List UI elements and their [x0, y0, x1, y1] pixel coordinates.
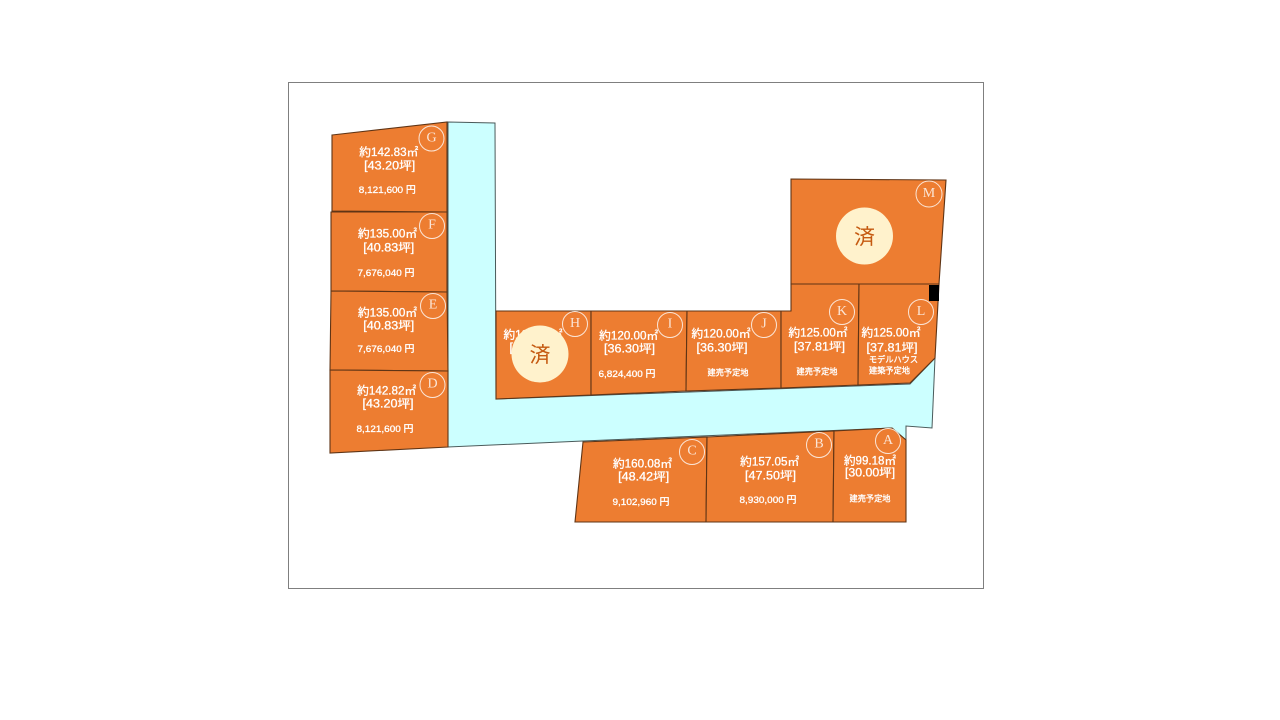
lot J: [36.30坪] — [696, 342, 748, 355]
lot I — [591, 311, 687, 395]
lot L: 約125.00㎡ — [862, 326, 921, 340]
lot A: 約99.18㎡ — [844, 454, 896, 468]
lot B: 8,930,000 円 — [740, 495, 796, 506]
lot K — [781, 284, 859, 388]
lot H — [496, 311, 591, 399]
lot G: 約142.83㎡ — [359, 145, 419, 159]
lot B: 約157.05㎡ — [740, 455, 800, 469]
lot E — [330, 291, 448, 371]
lot C: 9,102,960 円 — [612, 497, 670, 508]
lot I: I — [668, 316, 673, 332]
lot I: 6,824,400 円 — [598, 369, 656, 380]
lot A: [30.00坪] — [845, 467, 895, 480]
lot A: 建売予定地 — [850, 494, 891, 504]
lot L: L — [917, 304, 925, 319]
lot M: M — [923, 186, 936, 201]
lot C: [48.42坪] — [618, 471, 669, 484]
lot B: B — [814, 436, 824, 452]
lot G: G — [426, 130, 437, 146]
lot D: [43.20坪] — [362, 398, 414, 411]
lot A — [833, 428, 906, 522]
lot K: 建売予定地 — [796, 367, 838, 377]
lot D: 8,121,600 円 — [356, 424, 414, 435]
lot D — [330, 370, 448, 453]
lot H: 済 — [530, 339, 550, 369]
lot H: [36.30坪] — [510, 342, 560, 355]
lot K: [37.81坪] — [794, 341, 845, 354]
black marker — [929, 285, 939, 301]
lot C: 約160.08㎡ — [613, 457, 672, 471]
lot L: モデルハウス — [869, 355, 918, 365]
lot K: 約125.00㎡ — [788, 326, 848, 340]
lot J: 約120.00㎡ — [692, 327, 751, 341]
lot G: 8,121,600 円 — [359, 185, 416, 196]
lot A: A — [883, 433, 894, 448]
lot D: 約142.82㎡ — [357, 384, 417, 398]
lot H: 約120.00㎡ — [504, 328, 563, 342]
lot I: [36.30坪] — [604, 343, 655, 356]
lot M: 済 — [854, 221, 875, 251]
lot F: 7,676,040 円 — [358, 268, 414, 279]
lot B: [47.50坪] — [745, 470, 796, 483]
lot B — [706, 431, 834, 522]
lot L — [858, 284, 939, 385]
road — [448, 122, 935, 447]
lot M — [791, 179, 946, 284]
lot L: [37.81坪] — [866, 342, 918, 355]
lot J — [686, 311, 781, 391]
lot D: D — [427, 376, 438, 392]
lot C — [575, 437, 707, 522]
lot G — [332, 122, 447, 212]
lot F — [331, 212, 447, 292]
map frame — [288, 82, 984, 588]
lot E: E — [429, 298, 437, 312]
lot J: J — [761, 316, 767, 332]
lot K: K — [837, 304, 847, 319]
lot E: 7,676,040 円 — [358, 344, 414, 355]
lot I: 約120.00㎡ — [599, 329, 659, 343]
lot F: 約135.00㎡ — [358, 227, 417, 241]
lot G: [43.20坪] — [364, 160, 415, 173]
lot L: 建築予定地 — [869, 366, 910, 376]
lot F: [40.83坪] — [363, 242, 414, 255]
lot E: 約135.00㎡ — [358, 306, 417, 320]
lot E: [40.83坪] — [363, 320, 414, 333]
lot C: C — [687, 444, 697, 458]
lot H: H — [570, 316, 580, 331]
lot J: 建売予定地 — [708, 368, 749, 378]
lot F: F — [428, 218, 436, 232]
